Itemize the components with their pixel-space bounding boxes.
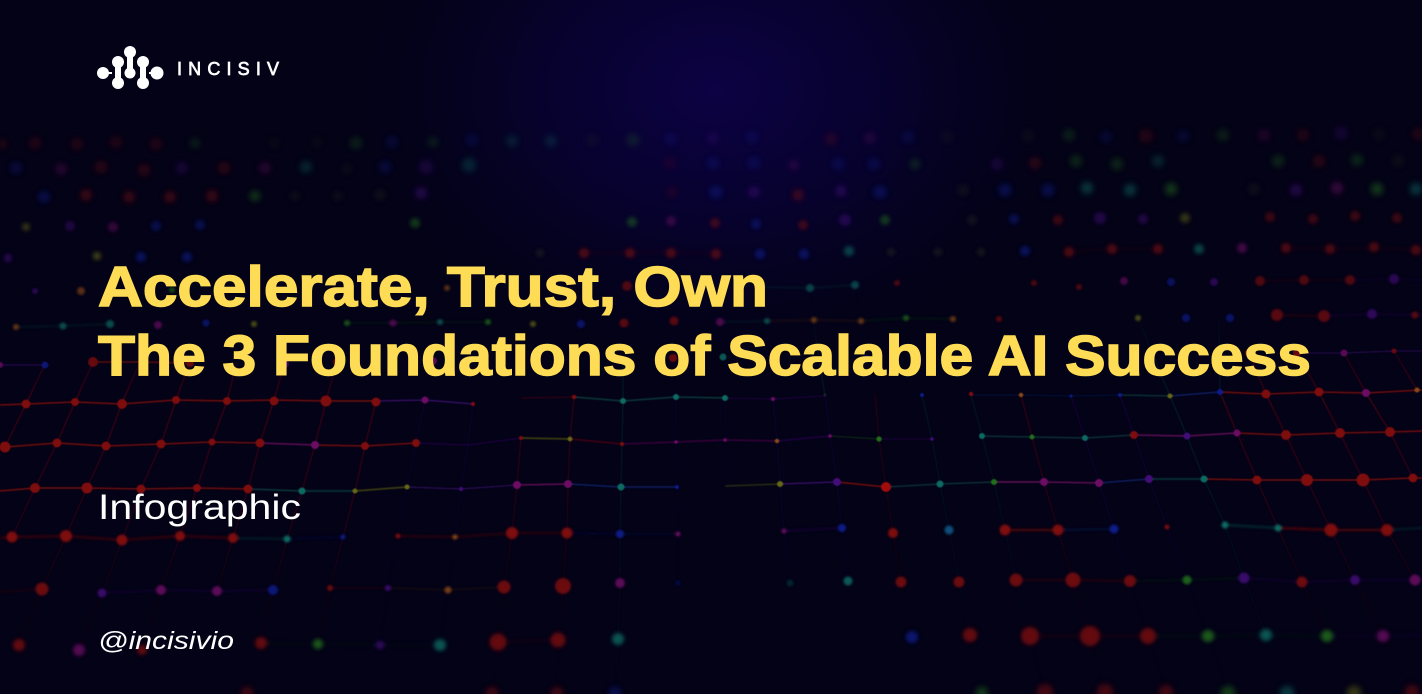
logo icon [97, 46, 164, 89]
grid row N [13, 626, 1422, 656]
grid row J [0, 427, 1422, 452]
subtitle: Infographic: Infographic [98, 488, 301, 527]
grid row A [0, 126, 1422, 150]
grid row H [0, 348, 1422, 368]
grid row C [38, 182, 1422, 202]
grid row K [0, 474, 1422, 494]
logo [97, 46, 279, 89]
grid row O [241, 684, 1419, 694]
logo wordmark: INCISIV [177, 59, 279, 79]
grid row D [22, 211, 1402, 232]
grid row B [10, 154, 1404, 176]
grid row M [0, 572, 1422, 598]
title [98, 255, 1311, 388]
title: Accelerate, Trust, Own [98, 255, 768, 319]
grid row E [4, 242, 1421, 262]
grid row L [0, 522, 1422, 546]
grid row I [0, 388, 1422, 409]
grid row G [13, 309, 1422, 330]
title: The 3 Foundations of Scalable AI Success [98, 324, 1311, 388]
grid column lines [5, 285, 1417, 692]
grid row F [32, 274, 1422, 295]
social handle: @incisivio [98, 627, 234, 655]
